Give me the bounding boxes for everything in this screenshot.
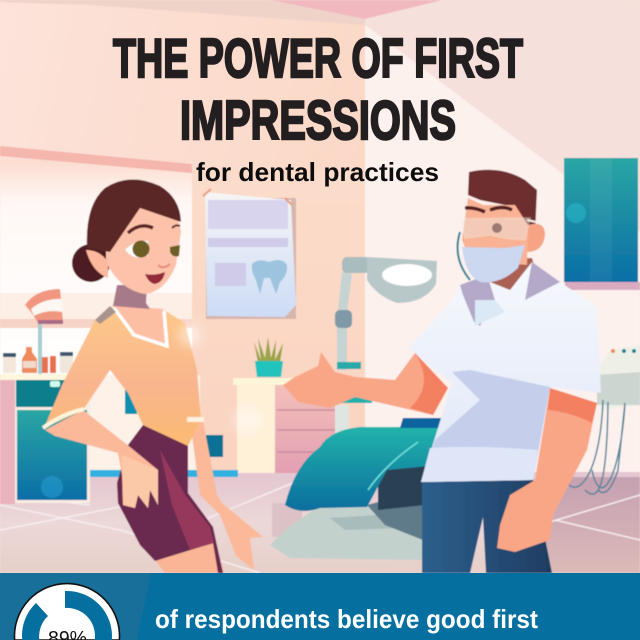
shirt — [408, 262, 601, 482]
neck — [113, 285, 150, 309]
bottles — [3, 347, 73, 373]
dental lamp — [334, 257, 437, 435]
dental chair — [90, 386, 445, 560]
chest — [112, 305, 168, 347]
face mask — [462, 245, 525, 282]
face — [106, 203, 181, 294]
hair — [87, 179, 181, 252]
eye — [492, 223, 502, 233]
brows — [465, 208, 512, 212]
eyes and brows — [125, 241, 148, 258]
stethoscope — [458, 232, 470, 280]
hair bun — [72, 244, 110, 282]
ear — [86, 250, 108, 278]
sweater body and sleeve — [44, 307, 201, 446]
legs — [155, 540, 224, 573]
dental model: teeth on stand — [25, 289, 63, 374]
pants — [422, 477, 552, 573]
woman patient — [43, 179, 263, 573]
bokeh highlights — [178, 323, 262, 434]
neckline trim — [114, 308, 167, 346]
plant side table and drawers — [233, 337, 337, 473]
neck — [490, 258, 540, 310]
lowered arm and hand — [497, 388, 597, 552]
skirt — [117, 425, 223, 573]
panel: statistic band — [0, 573, 640, 640]
teal wall cabinet — [564, 158, 640, 290]
donut chart: 89% — [14, 584, 120, 640]
bracelet — [187, 417, 204, 422]
right forearm and hand — [190, 420, 263, 570]
hair — [468, 170, 537, 235]
statistic text: of respondents believe good first — [155, 604, 538, 634]
equipment console and hoses — [566, 345, 640, 494]
heading: title: IMPRESSIONS — [180, 89, 456, 151]
floor tiles — [0, 375, 640, 573]
face — [462, 198, 528, 265]
dentist — [283, 170, 601, 573]
poster with tooth — [203, 189, 296, 319]
cabinet left — [0, 374, 92, 504]
ear — [527, 224, 545, 252]
heading: title — [113, 27, 523, 151]
nose and lips — [158, 264, 170, 267]
subtitle: for dental practices — [196, 157, 439, 187]
extended arm and hand — [283, 352, 448, 415]
glasses — [462, 218, 530, 240]
left arm and hand — [45, 410, 158, 508]
window with rail — [0, 146, 192, 375]
